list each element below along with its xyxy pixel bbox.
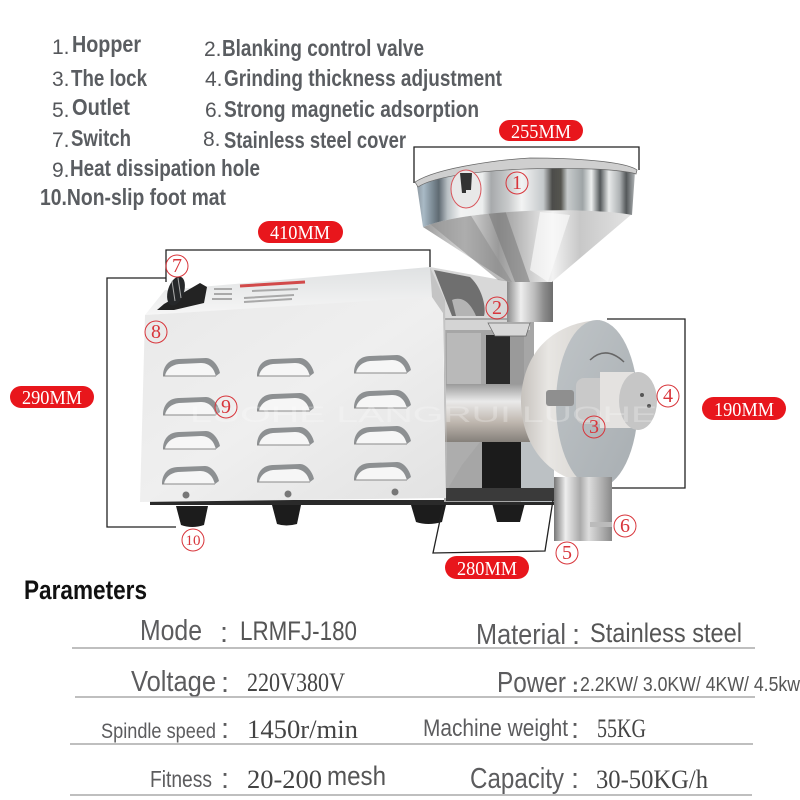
row: mode and material: Stainless steel bbox=[590, 618, 742, 648]
dimension: 190MM bbox=[607, 319, 786, 488]
row: fitness and capacity: mesh bbox=[327, 761, 386, 791]
row: fitness and capacity: : bbox=[221, 763, 229, 795]
dimension: 255MM bbox=[414, 120, 639, 183]
dimension: 190MM: 190MM bbox=[714, 399, 774, 421]
machine base and feet bbox=[150, 500, 555, 527]
row: spindle speed and machine weight: Spindle speed bbox=[101, 720, 216, 743]
part 6 label: 6. bbox=[205, 99, 223, 122]
row: mode and material: Material bbox=[476, 619, 566, 651]
part 7 label: Switch bbox=[71, 125, 131, 151]
heat dissipation slots bbox=[162, 355, 411, 498]
part 7 label bbox=[52, 125, 131, 152]
row: spindle speed and machine weight: 1450r/min bbox=[247, 715, 358, 744]
part 1 label: 1. bbox=[52, 36, 70, 59]
lock clamp bbox=[546, 390, 574, 406]
marker 4 bbox=[657, 385, 679, 407]
part 2 label: Blanking control valve bbox=[222, 35, 424, 61]
nameplate bbox=[212, 282, 305, 302]
row: mode and material: Mode bbox=[140, 615, 202, 647]
row: fitness and capacity bbox=[70, 761, 752, 795]
row: spindle speed and machine weight: : bbox=[221, 713, 229, 745]
row: voltage and power: 220V380V bbox=[247, 668, 345, 697]
valve plate bbox=[488, 323, 530, 336]
row: mode and material: LRMFJ-180 bbox=[240, 616, 357, 646]
dimension: 280MM bbox=[433, 500, 553, 580]
dimension: 410MM: 410MM bbox=[270, 222, 330, 244]
part 8 label: Stainless steel cover bbox=[224, 127, 406, 153]
marker 10: 10 bbox=[186, 533, 200, 549]
cabinet front: stainless steel cover bbox=[140, 267, 447, 502]
parameters table bbox=[70, 615, 800, 795]
heading: Parameters: Parameters bbox=[24, 575, 147, 605]
adjustment knob bbox=[576, 372, 657, 430]
row: spindle speed and machine weight bbox=[70, 713, 753, 745]
marker 7 bbox=[166, 255, 188, 277]
marker 5 bbox=[556, 542, 578, 564]
marker 1: 1 bbox=[512, 172, 522, 194]
marker 1 bbox=[506, 172, 528, 194]
rear shroud bbox=[430, 267, 507, 322]
circled part numbers bbox=[145, 172, 679, 564]
marker 4: 4 bbox=[663, 385, 673, 407]
marker 8: 8 bbox=[151, 321, 161, 343]
row: mode and material bbox=[72, 615, 755, 651]
row: mode and material: : bbox=[572, 619, 580, 651]
row: voltage and power: Voltage bbox=[131, 666, 216, 698]
marker 6: 6 bbox=[620, 515, 630, 537]
row: fitness and capacity: 30-50KG/h bbox=[596, 765, 708, 794]
marker 6 bbox=[614, 515, 636, 537]
part 9 label: Heat dissipation hole bbox=[70, 155, 260, 181]
row: spindle speed and machine weight: 55KG bbox=[597, 714, 646, 743]
part 4 label: Grinding thickness adjustment bbox=[224, 65, 502, 91]
row: fitness and capacity: : bbox=[571, 763, 579, 795]
row: voltage and power: Power bbox=[497, 667, 566, 699]
marker 2 bbox=[486, 297, 508, 319]
dimension: 280MM: 280MM bbox=[457, 558, 517, 580]
watermark: LUOHE LANGRUI LUOHE L bbox=[190, 402, 690, 427]
dimension: 410MM bbox=[166, 221, 430, 282]
outlet pipe bbox=[554, 477, 612, 541]
part 5 label: Outlet bbox=[72, 94, 130, 120]
marker 10 bbox=[182, 529, 204, 551]
marker 7: 7 bbox=[172, 255, 182, 277]
marker 8 bbox=[145, 321, 167, 343]
part 3 label: The lock bbox=[71, 65, 147, 91]
row: voltage and power: : bbox=[221, 667, 229, 699]
row: voltage and power: : bbox=[572, 675, 579, 697]
machine illustration bbox=[140, 158, 690, 541]
part 3 label bbox=[52, 65, 147, 91]
row: spindle speed and machine weight: : bbox=[571, 713, 579, 745]
dimension: 290MM bbox=[10, 278, 176, 527]
row: fitness and capacity: Capacity bbox=[470, 763, 564, 795]
row: voltage and power bbox=[75, 666, 800, 699]
part 10 label: 10.Non-slip foot mat bbox=[40, 184, 226, 210]
part 3 label: 3. bbox=[52, 68, 70, 91]
row: spindle speed and machine weight: Machine weight bbox=[423, 715, 568, 742]
part 8 label: 8. bbox=[203, 128, 221, 151]
part 5 label: 5. bbox=[52, 99, 70, 122]
part 5 label bbox=[52, 94, 130, 122]
marker 5: 5 bbox=[562, 542, 572, 564]
part 1 label bbox=[52, 31, 141, 59]
part 4 label: 4. bbox=[205, 68, 223, 91]
part 1 label: Hopper bbox=[72, 31, 141, 57]
mid section with shaft bbox=[444, 318, 554, 502]
icon: rotary switch bbox=[157, 274, 207, 310]
icon: warning label on hopper bbox=[451, 170, 481, 208]
marker 3: 3 bbox=[589, 416, 599, 438]
hopper bbox=[415, 158, 637, 322]
part 7 label: 7. bbox=[52, 129, 70, 152]
adjustment disc bbox=[556, 320, 638, 488]
marker 2: 2 bbox=[492, 297, 502, 319]
row: fitness and capacity: Fitness bbox=[150, 766, 212, 792]
parts list bbox=[40, 31, 502, 210]
marker 9 bbox=[215, 396, 237, 418]
dimension: 290MM: 290MM bbox=[22, 387, 82, 409]
row: fitness and capacity: 20-200 bbox=[247, 765, 322, 794]
marker 9: 9 bbox=[221, 396, 231, 418]
part 2 label: 2. bbox=[204, 38, 222, 61]
marker 3 bbox=[583, 416, 605, 438]
part 6 label: Strong magnetic adsorption bbox=[224, 96, 479, 122]
grinding housing bbox=[521, 320, 657, 488]
row: mode and material: : bbox=[220, 617, 228, 649]
dimension: 255MM: 255MM bbox=[511, 121, 571, 143]
part 9 label: 9. bbox=[52, 159, 70, 182]
